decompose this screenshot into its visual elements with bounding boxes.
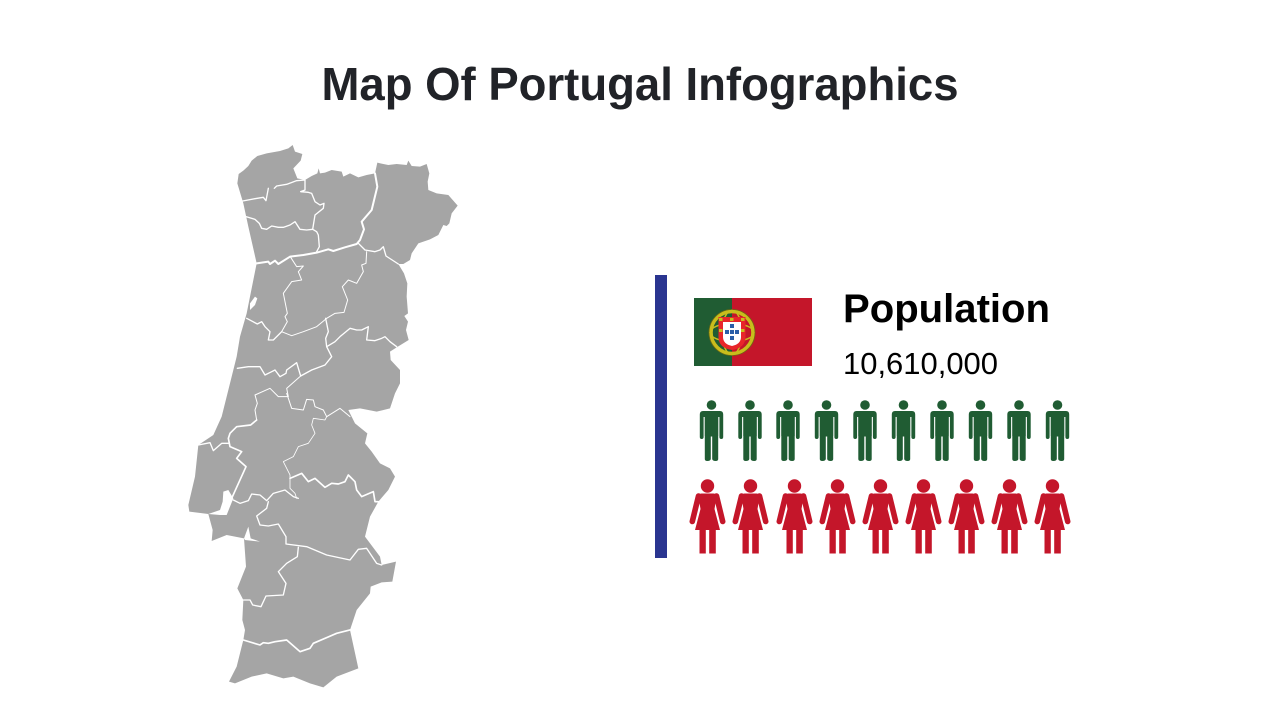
title: Map Of Portugal Infographics <box>322 58 958 110</box>
heading: population: Population <box>843 287 1050 331</box>
map silhouette <box>188 145 458 687</box>
estuaries <box>208 297 260 542</box>
row of female icons <box>692 479 1068 554</box>
map of Portugal <box>188 145 458 687</box>
accent bar <box>655 275 667 558</box>
population number: 10,610,000 <box>843 346 998 381</box>
region borders <box>198 173 398 652</box>
row of male icons <box>700 400 1069 461</box>
flag of Portugal <box>694 298 812 366</box>
flag emblem <box>709 310 755 356</box>
